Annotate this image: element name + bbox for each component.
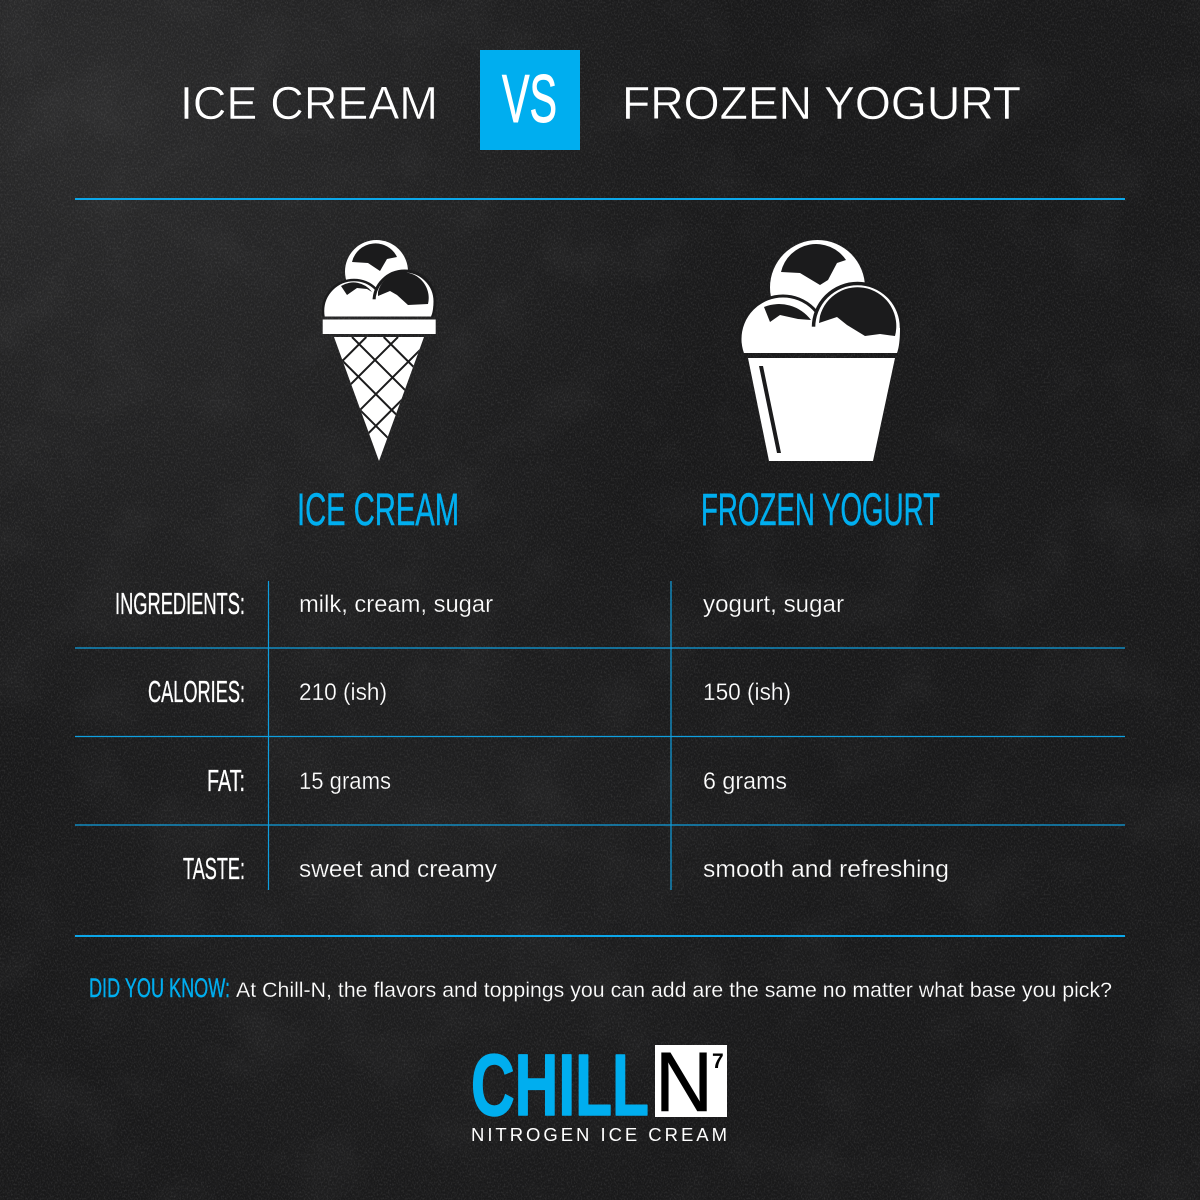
row: taste: TASTE: (183, 851, 245, 886)
logo: Chill-N: CHILL (471, 1037, 649, 1134)
logo: Chill-N: N (655, 1035, 713, 1129)
top divider (75, 198, 1125, 200)
row: fat: 6 grams (703, 768, 787, 795)
badge: VS (480, 50, 580, 150)
comparison table (75, 581, 1125, 890)
row: calories: 150 (ish) (703, 679, 791, 706)
row: fat (207, 763, 787, 798)
row: calories: 210 (ish) (299, 679, 387, 706)
row: taste: smooth and refreshing (703, 856, 949, 883)
row: calories (148, 674, 791, 709)
row: fat: 15 grams (299, 768, 391, 795)
logo: Chill-N: 7 (712, 1050, 724, 1073)
icon: frozen yogurt cup (740, 240, 902, 461)
row: calories: CALORIES: (148, 674, 245, 709)
row: ingredients: milk, cream, sugar (299, 591, 493, 618)
row: taste: sweet and creamy (299, 856, 497, 883)
heading: ice cream column: ICE CREAM (297, 484, 459, 535)
did you know callout: At Chill-N, the flavors and toppings you can add are the same no matter what base you pick? (236, 978, 1112, 1002)
did you know callout (89, 973, 1112, 1003)
row: ingredients (115, 586, 844, 621)
icon: ice cream cone (322, 240, 436, 461)
row: ingredients: yogurt, sugar (703, 591, 844, 618)
row: fat: FAT: (207, 763, 245, 798)
title: ice cream: ICE CREAM (180, 77, 438, 129)
logo: Chill-N: NITROGEN ICE CREAM (471, 1124, 727, 1145)
badge: VS: VS (502, 61, 557, 137)
bottom divider (75, 935, 1125, 937)
heading: frozen yogurt column: FROZEN YOGURT (701, 484, 940, 535)
title: frozen yogurt: FROZEN YOGURT (622, 77, 1021, 129)
did you know callout: DID YOU KNOW: (89, 973, 230, 1003)
row: ingredients: INGREDIENTS: (115, 586, 245, 621)
row: taste (183, 851, 949, 886)
